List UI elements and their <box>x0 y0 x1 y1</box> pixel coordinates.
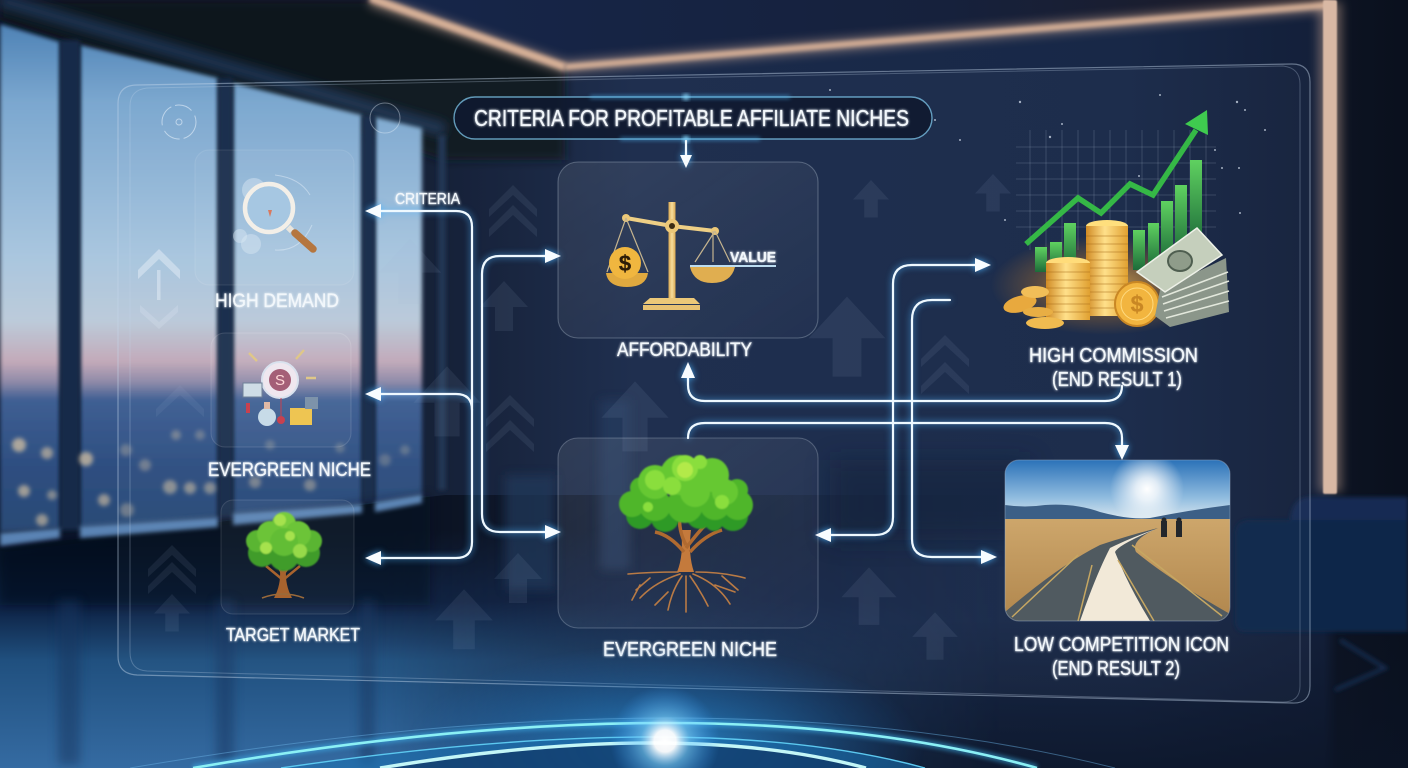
arrow heads <box>365 155 1129 565</box>
label: value: VALUE <box>730 250 776 266</box>
icon: dollar stack <box>1137 228 1229 327</box>
card: affordability <box>558 162 818 361</box>
window sill <box>0 494 422 546</box>
stars <box>829 89 1266 221</box>
icon: balance scale <box>606 202 735 310</box>
decorative rings <box>162 103 400 139</box>
title to affordability <box>685 141 687 158</box>
icon: balance scale: $ <box>619 251 631 276</box>
card: high demand <box>195 150 354 312</box>
title pill <box>454 94 932 142</box>
criteria bracket <box>378 211 472 558</box>
heading: HIGH COMMISSION <box>1029 345 1198 367</box>
right upper <box>828 265 978 535</box>
ceiling <box>389 0 1324 46</box>
faint arrow icon left <box>138 249 180 329</box>
window frames dark <box>60 40 375 530</box>
warm ceiling light strips <box>370 0 1330 67</box>
heading <box>1014 634 1229 680</box>
icon: green arrow <box>1026 110 1208 244</box>
label: criteria: CRITERIA <box>395 191 460 208</box>
connector arrows <box>365 141 1129 565</box>
heading: (END RESULT 2) <box>1052 658 1180 680</box>
icon: coins <box>1002 220 1159 329</box>
heading: TARGET MARKET <box>226 625 360 645</box>
to center cards <box>482 256 548 532</box>
icon: small tree <box>246 512 322 598</box>
dim furniture <box>505 475 555 590</box>
heading: EVERGREEN NICHE <box>208 459 371 481</box>
heading: LOW COMPETITION ICON <box>1014 634 1229 656</box>
left window panes <box>0 24 446 532</box>
icon: money ideas: S <box>275 372 285 389</box>
ghost arrows background <box>148 174 1011 660</box>
icon: money ideas <box>243 350 318 426</box>
icon: coins: $ <box>1131 291 1144 317</box>
heading: HIGH DEMAND <box>215 291 339 312</box>
card: evergreen niche left <box>208 333 371 481</box>
evergreen to low competition <box>688 423 1122 448</box>
card: target market <box>221 500 360 645</box>
heading <box>1029 345 1198 391</box>
vertical light strip <box>1318 2 1342 492</box>
icon: tree with roots <box>619 455 753 612</box>
heading: (END RESULT 1) <box>1052 369 1182 391</box>
floor <box>0 495 1000 768</box>
icon: green bars <box>1035 160 1202 272</box>
icon: magnifying glass <box>233 175 313 254</box>
title pill: CRITERIA FOR PROFITABLE AFFILIATE NICHES <box>474 105 909 131</box>
icon: growth chart grid <box>1016 130 1216 250</box>
commission to affordability <box>688 376 1122 401</box>
label: value <box>690 250 776 266</box>
city lights <box>12 430 410 526</box>
panel: low competition <box>1005 452 1230 680</box>
bottom glowing arc <box>130 640 1115 768</box>
heading: AFFORDABILITY <box>617 340 752 361</box>
floor reflection columns <box>58 600 375 765</box>
panel: high commission <box>990 110 1229 391</box>
heading: EVERGREEN NICHE <box>603 639 777 661</box>
glass panel <box>118 64 1310 703</box>
sofa silhouette <box>1235 497 1408 690</box>
icon: road photo <box>1005 452 1230 621</box>
card: evergreen niche center <box>558 438 818 661</box>
